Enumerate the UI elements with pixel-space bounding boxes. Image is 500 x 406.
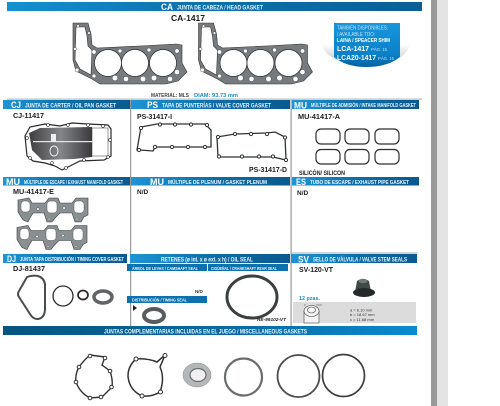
icon: round gasket with tab bbox=[128, 354, 167, 398]
heading: valve stem seals: SELLO DE VÁLVULA / VALVE STEM SEALS bbox=[313, 256, 407, 263]
sub-heading: crankshaft rear seal: CIGÜEÑAL / CRANKSHAFT REAR SEAL bbox=[211, 265, 277, 272]
callout: also available bbox=[322, 23, 410, 67]
panel: intake manifold gasket bbox=[292, 100, 419, 177]
heading: oil seal bbox=[130, 254, 290, 264]
heading: intake manifold: MÚLTIPLE DE ADMISIÓN / INTAKE MANIFOLD GASKET bbox=[311, 101, 416, 109]
heading: exhaust manifold: MÚLTIPLE DE ESCAPE / EXHAUST MANIFOLD GASKET bbox=[24, 179, 123, 186]
panel: valve stem seals bbox=[291, 254, 417, 323]
callout: also available: LAINA / SPEACER SHIM bbox=[337, 38, 390, 44]
heading: head gasket bbox=[7, 2, 422, 12]
icon: large o-ring bbox=[53, 286, 73, 306]
scrollbar strip bbox=[431, 0, 448, 406]
dimensions text bbox=[350, 308, 375, 322]
icon: exhaust gasket bottom bbox=[17, 226, 87, 250]
part number: MU-41417-E bbox=[13, 189, 54, 196]
callout: also available: LCA-1417 bbox=[337, 46, 369, 53]
panel: exhaust pipe gasket bbox=[292, 177, 419, 197]
icon: thick ring bbox=[94, 291, 112, 303]
icon: exhaust gasket top bbox=[18, 198, 88, 222]
heading: intake manifold bbox=[292, 100, 419, 111]
sub-heading: crankshaft rear seal bbox=[208, 264, 288, 272]
icon: timing cover gasket bbox=[18, 276, 45, 319]
heading: miscellaneous bbox=[3, 326, 417, 336]
heading: exhaust pipe: TUBO DE ESCAPE / EXHAUST PIPE GASKET bbox=[310, 180, 410, 186]
callout: also available: TAMBIÉN DISPONIBLES: bbox=[337, 24, 388, 32]
icon: valve seal bbox=[353, 279, 375, 297]
icon: timing seal bbox=[144, 309, 164, 322]
panel: timing cover gasket bbox=[3, 254, 127, 319]
gasket: head left bbox=[73, 23, 187, 84]
part number: right valve cover: PS-31417-D bbox=[249, 167, 287, 174]
material and diameter: MATERIAL: MLS bbox=[151, 93, 190, 99]
icon: crankshaft rear seal bbox=[227, 276, 277, 318]
part number: CJ-11417 bbox=[13, 113, 44, 120]
heading: oil pan: CJ bbox=[11, 100, 21, 110]
callout: also available: PÁG. 15 bbox=[371, 46, 387, 52]
material and diameter bbox=[151, 93, 239, 99]
icon: small o-ring bbox=[78, 290, 88, 300]
sub-heading: camshaft seal bbox=[127, 264, 207, 272]
not available: N/D bbox=[297, 190, 308, 197]
heading: valve cover: TAPA DE PUNTERÍAS / VALVE COVER GASKET bbox=[162, 101, 271, 109]
panel: head gasket bbox=[7, 2, 422, 99]
dimensions panel bbox=[293, 302, 416, 323]
quantity: 12 pzas. bbox=[299, 296, 320, 302]
heading: oil pan bbox=[3, 100, 130, 110]
heading: valve cover: PS bbox=[147, 100, 158, 110]
heading: intake manifold: MU bbox=[294, 100, 307, 111]
callout: also available: / AVAILABLE TOO: bbox=[337, 32, 375, 38]
not available: N/D bbox=[137, 189, 148, 196]
material note: SILICÓN/ SILICON bbox=[299, 169, 345, 177]
sub-heading: camshaft seal: ÁRBOL DE LEVAS / CAMSHAFT SEAL bbox=[132, 265, 198, 272]
heading: timing cover: JUNTA TAPA DISTRIBUCIÓN / TIMING COVER GASKET bbox=[20, 255, 124, 263]
icon: seal diagram bbox=[304, 305, 322, 323]
icon: valve cover gasket left bbox=[137, 123, 211, 152]
sub-heading: timing seal bbox=[127, 296, 207, 304]
heading: valve stem seals: SV bbox=[298, 254, 310, 266]
panel: gasket plenum bbox=[131, 177, 290, 196]
dimensions text: c = 11.68 mm bbox=[350, 317, 375, 322]
heading: valve stem seals bbox=[291, 254, 417, 266]
part number: rear seal: RE-99102-VT bbox=[257, 317, 287, 322]
heading: oil pan: JUNTA DE CARTER / OIL PAN GASKET bbox=[25, 103, 116, 109]
icon: water pump gasket bbox=[74, 354, 113, 400]
callout: also available: PÁG. 15 bbox=[378, 55, 394, 61]
callout: also available: LCA20-1417 bbox=[337, 55, 376, 62]
icon: ring one bbox=[225, 358, 262, 396]
panel: exhaust manifold gasket bbox=[3, 177, 130, 250]
heading: exhaust pipe: ES bbox=[296, 177, 306, 188]
part number: left valve cover: PS-31417-I bbox=[137, 114, 172, 121]
heading: valve cover bbox=[131, 100, 290, 110]
gasket: head right bbox=[198, 23, 312, 84]
heading: miscellaneous: JUNTAS COMPLEMENTARIAS INCLUIDAS EN EL JUEGO / MISCELLANEOUS GASKETS bbox=[104, 330, 307, 336]
material and diameter: DIAM: 93.73 mm bbox=[194, 93, 239, 99]
grid dividers bbox=[7, 98, 422, 326]
icon: valve cover gasket right bbox=[216, 132, 288, 162]
panel: oil pan gasket bbox=[3, 100, 130, 170]
heading: plenum: MU bbox=[150, 177, 164, 188]
heading: exhaust pipe bbox=[292, 177, 419, 188]
heading: plenum bbox=[131, 177, 290, 188]
heading: timing cover: DJ bbox=[7, 254, 16, 264]
heading: plenum: MÚLTIPLE DE PLENUM / GASKET PLENUM bbox=[168, 179, 267, 186]
not available: N/D bbox=[195, 289, 204, 294]
dimensions text: b = 18.67 mm bbox=[350, 312, 375, 317]
icon: ring two bbox=[278, 355, 320, 397]
heading: exhaust manifold bbox=[3, 177, 130, 188]
part number: SV-120-VT bbox=[299, 267, 334, 274]
heading: head gasket: JUNTA DE CABEZA / HEAD GASKET bbox=[177, 5, 263, 11]
heading: oil seal: RETENES (ø int. x ø ext. x h) / OIL SEAL bbox=[161, 258, 253, 264]
icon: ring three bbox=[322, 354, 364, 396]
icon: metal seal bbox=[183, 363, 211, 387]
dimensions text: a = 6.10 mm bbox=[350, 308, 373, 312]
icon: intake gasket set bbox=[316, 129, 399, 164]
sub-heading: timing seal: DISTRIBUCIÓN / TIMING SEAL bbox=[132, 296, 187, 304]
part number: MU-41417-A bbox=[298, 114, 340, 121]
part number: DJ-81437 bbox=[13, 266, 45, 273]
heading: head gasket: CA bbox=[161, 2, 173, 12]
heading: exhaust manifold: MU bbox=[6, 177, 20, 188]
panel: oil seal bbox=[127, 254, 290, 322]
part number: CA-1417: CA-1417 bbox=[171, 14, 206, 23]
panel: valve cover gasket bbox=[131, 100, 290, 174]
icon: arrow marker bbox=[133, 305, 137, 311]
icon: oil pan gasket bbox=[25, 123, 111, 170]
panel: miscellaneous gaskets bbox=[3, 326, 417, 400]
heading: timing cover bbox=[3, 254, 127, 264]
